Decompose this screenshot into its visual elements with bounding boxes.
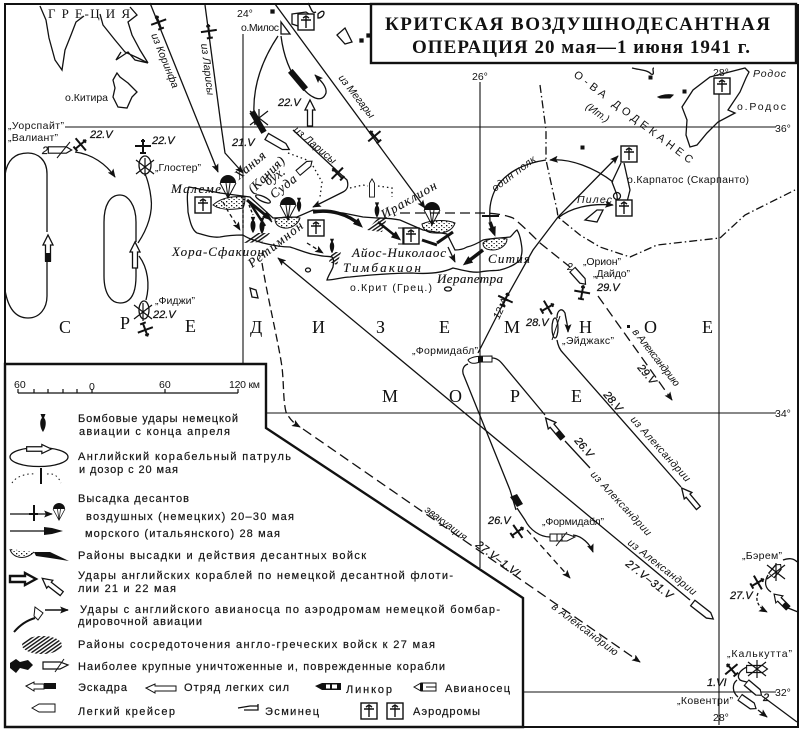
legend: ship types: Отряд легких сил [184,682,289,694]
Ajax: 28.V [600,388,626,416]
Western Mediterranean patrols: 22.V [89,129,114,141]
Crete place names: (Кания) [245,153,288,196]
Crete landing zones [213,197,507,265]
Barham: 27.V [729,590,754,602]
Barham: „Бэрем” [742,550,782,562]
Calcutta and Coventry: „Ковентри” [677,695,734,707]
sea name letters: М [504,317,520,337]
Ajax: 28.V [525,317,550,329]
Western Mediterranean patrols [5,120,202,339]
main route from Alexandria: из Александрии [625,537,699,598]
Formidable southern position [487,490,604,578]
sea name letters: Р [510,386,520,406]
legend: ship strikes [10,570,453,598]
sea name letters: Р [120,313,130,333]
Crete place names: Сития [488,251,530,266]
evacuation route: 27.V–1.VI [472,538,522,580]
Western Mediterranean patrols: 2 [41,145,48,157]
legend: bomb strikes: Бомбовые удары немецкой [78,413,238,425]
legend: landing areas: Районы высадки и действия десантных войск [78,550,366,562]
dashed route east of Crete: „Дайдо” [593,268,630,280]
legend: concentration areas: Районы сосредоточения англо-греческих войск к 27 мая [78,639,435,651]
sea name letters: З [376,317,385,337]
Dodecanese labels: о.Родос [737,101,786,113]
scale bar [14,379,260,393]
legend: ship types: Авианосец [445,683,511,695]
Formidable northern position: из Александрии [588,469,654,539]
legend: carrier strikes: дировочной авиации [78,616,202,628]
sea name letters: Е [185,316,196,336]
Crete place names [170,148,530,294]
Formidable southern position: „Формидабл” [542,516,604,528]
legend: ship strikes: лии 21 и 22 мая [78,583,176,595]
coordinate labels [237,8,791,724]
Barham [729,550,798,612]
legend: destroyed ships: Наиболее крупные уничтоженные и, поврежденные корабли [78,661,445,673]
coordinate labels: 24° [237,8,253,20]
Formidable northern position [412,345,654,539]
Calcutta and Coventry: 2 [762,692,769,704]
Dodecanese labels [490,68,787,216]
legend: British patrol: и дозор с 20 мая [79,464,178,476]
sea name letters: Д [250,317,262,337]
Crete place names: Тимбакион [343,260,421,275]
Dodecanese labels: Пилес [577,194,613,206]
sea name letters: Н [579,317,592,337]
routes from Greece: из Коринфа [148,32,181,90]
dashed route east of Crete: 29.V [634,361,660,389]
Calcutta and Coventry: 1.VI [707,677,727,689]
legend: carrier strikes [14,604,500,632]
routes from Greece: из Мегары [336,72,377,121]
legend: landings: Высадка десантов [78,493,189,505]
evacuation route: эвакуация [422,504,470,544]
land: Dodecanese islands [250,68,749,298]
Formidable southern position: 26.V [487,515,512,527]
routes from Greece: из Ларисы [198,43,216,96]
Crete place names: Ханья [231,148,269,183]
legend: bomb strikes: авиации с конца апреля [79,426,230,438]
title box [371,4,796,63]
legend: landings: морского (итальянского) 28 мая [85,528,280,540]
Calcutta and Coventry: „Калькутта” [727,648,792,660]
evacuation route: в Александрию [549,601,620,659]
legend: British patrol [10,444,291,484]
main route from Alexandria: 27.V–31.V [622,557,676,603]
Crete place names: о.Крит (Грец.) [350,282,432,294]
Crete place names: бух. [261,164,288,188]
land: Crete [187,187,522,280]
coordinate labels: 28° [713,67,729,79]
Western Mediterranean patrols: „Фиджи” [155,295,196,307]
Western Mediterranean patrols: „Глостер” [155,162,202,174]
Dodecanese labels: Родос [753,68,787,80]
routes from Greece [148,3,425,208]
legend: British patrol: Английский корабельный патруль [78,451,291,463]
Ajax: из Александрии [628,414,693,485]
sea name letters: С [59,317,71,337]
sea name letters: О [449,386,462,406]
dashed route east of Crete: 2 [566,261,573,273]
legend: ship types [26,682,511,719]
dashed route east of Crete: „Орион” [583,256,622,268]
Ajax [525,297,702,511]
coordinate labels: 26° [472,71,488,83]
scale bar: 120 км [229,379,260,391]
legend: ship types: Легкий крейсер [78,706,175,718]
airfields on Crete [195,197,419,244]
Crete place names: Ретимнон [244,218,306,271]
Ajax: „Эйджакс” [562,335,614,347]
Crete place names: Суда [267,171,300,201]
Crete place names: Иерапетра [436,271,504,286]
dashed route east of Crete: 29.V [596,282,621,294]
carrier strike routes to Karpathos: 12-А [491,296,511,321]
coordinate labels: 36° [775,123,791,135]
Western Mediterranean patrols: „Уорспайт” [8,120,64,132]
Crete place names: Ираклион [377,178,439,222]
legend: ship types: Эскадра [78,682,128,694]
dashed route east of Crete [400,213,682,400]
Dodecanese labels: О-ВА ДОДЕКАНЕС [571,69,695,166]
Western Mediterranean patrols: „Валиант” [8,132,58,144]
routes from Greece: из Ларисы [291,124,339,167]
legend: ship types: Аэродромы [413,706,480,718]
Dodecanese labels: о.Карпатос (Скарпанто) [627,174,749,186]
Crete place names: Айос-Николаос [351,245,446,260]
legend: ship types: Эсминец [265,706,320,718]
legend: concentration areas [22,636,435,654]
sea name letters [59,313,713,406]
parachute and bomb markers [220,175,440,253]
Calcutta and Coventry [677,648,797,722]
sea name letters: Е [439,317,450,337]
strikes and landing arrows on Crete [223,193,483,263]
legend: carrier strikes: Удары с английского авианосца по аэродромам немецкой бомбар- [80,604,500,616]
scale bar: 0 [89,381,95,393]
title box: ОПЕРАЦИЯ 20 мая—1 июня 1941 г. [412,37,750,58]
Milos labels and ships: о.Милос [241,22,279,34]
evacuation route [262,263,640,662]
legend: landings [10,493,294,540]
Dodecanese labels: (Ит.) [583,101,612,125]
Dodecanese labels: один полк [490,153,539,194]
main route from Alexandria [278,258,715,622]
coordinate labels: 34° [775,408,791,420]
Crete place names: Хора-Сфакион [171,244,264,259]
sea name letters: И [312,317,325,337]
coordinate labels: 32° [775,687,791,699]
Milos labels and ships: 21.V [231,137,256,149]
legend: ship types: Линкор [346,684,392,696]
Formidable northern position: „Формидабл” [412,345,478,357]
legend: ship strikes: Удары английских кораблей по немецкой десантной флоти- [78,570,453,582]
coordinate labels: 28° [713,712,729,724]
carrier strike routes to Karpathos [478,156,618,353]
Formidable northern position: 26.V [571,434,597,462]
sea name letters: Е [702,317,713,337]
scale bar: 60 [159,379,171,391]
land: Greece and islands [40,3,370,108]
sea name letters: О [644,317,657,337]
label: Greece: Г Р Е-Ц И Я [48,6,130,21]
Milos labels and ships [231,14,392,197]
Western Mediterranean patrols: 22.V [152,309,177,321]
Western Mediterranean patrols: 22.V [151,135,176,147]
label: Kythira: о.Китира [65,92,108,104]
legend panel [5,364,523,727]
sea name letters: Е [571,386,582,406]
dashed route east of Crete: в Александрию [630,326,682,389]
Milos labels and ships: 22.V [277,97,302,109]
legend: landings: воздушных (немецких) 20–30 мая [86,511,294,523]
Crete place names: Малеме [170,181,221,196]
dash-dot boundary [540,85,795,257]
title box: КРИТСКАЯ ВОЗДУШНОДЕСАНТНАЯ [385,14,770,35]
legend: bomb strikes [40,413,238,438]
scale bar: 60 [14,379,26,391]
sea name letters: М [382,386,398,406]
